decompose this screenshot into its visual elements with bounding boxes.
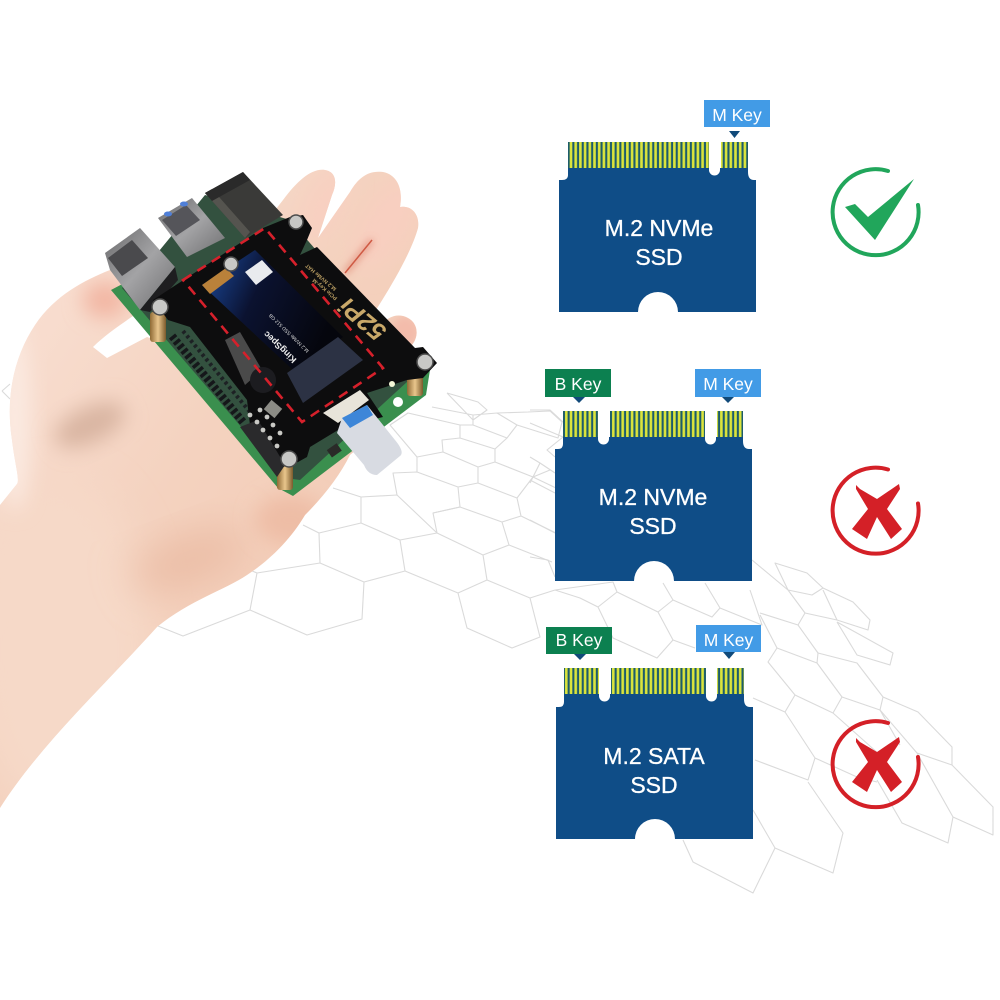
B key label	[546, 627, 612, 660]
raspberry pi board with M.2 HAT	[105, 172, 437, 496]
card text: SSD	[629, 513, 677, 539]
brand marking: PCIe Key-M	[312, 276, 339, 301]
brand marking: M.2 NVMe HAT	[304, 262, 338, 291]
SSD card 1: M.2 NVMe, M key	[559, 100, 770, 312]
M key label: M Key	[703, 374, 753, 394]
ribbon cable	[323, 390, 402, 475]
background hexagon mesh	[2, 384, 993, 893]
M key label	[695, 369, 761, 403]
B key label	[545, 369, 611, 403]
SSD card 2: M.2 NVMe, B and M key	[545, 369, 761, 581]
B key label: B Key	[556, 630, 603, 650]
hand holding the board	[0, 160, 432, 820]
green PCB	[111, 280, 430, 496]
power components	[225, 332, 282, 418]
SSD card 3: M.2 SATA, B and M key	[546, 625, 761, 839]
solder pads	[248, 408, 282, 448]
PCB shadowed top surface	[122, 195, 420, 480]
USB port right	[158, 198, 225, 257]
M.2 SSD: M.2 NVMe SSD 512 GB	[267, 311, 311, 354]
M key label	[696, 625, 761, 659]
switch component	[327, 443, 342, 458]
M.2 slot	[287, 337, 363, 403]
status LED and mounting hole	[389, 381, 403, 407]
card text: M.2 NVMe	[605, 215, 713, 241]
M key label: M Key	[704, 630, 754, 650]
M.2 SSD	[202, 250, 343, 370]
contacts	[563, 411, 743, 437]
screws	[152, 215, 433, 467]
contacts	[568, 142, 748, 168]
icon: red cross	[833, 468, 919, 554]
M key label	[704, 100, 770, 138]
card text: SSD	[630, 772, 678, 798]
icon: red cross	[833, 721, 919, 807]
standoffs	[150, 312, 423, 490]
B key label: B Key	[555, 374, 602, 394]
card text: SSD	[635, 244, 683, 270]
card text	[605, 215, 713, 270]
card text	[603, 743, 705, 798]
QR label	[245, 260, 273, 285]
USB port left	[105, 228, 178, 312]
M key label: M Key	[712, 105, 762, 125]
SSD brand text: KingSpec	[262, 329, 298, 365]
GPIO pin header	[172, 331, 250, 422]
black HAT board	[153, 215, 437, 467]
card text	[599, 484, 707, 539]
card text: M.2 SATA	[603, 743, 705, 769]
icon: green check	[833, 169, 919, 255]
infographic canvas	[0, 100, 994, 894]
ethernet port	[205, 172, 283, 238]
card text: M.2 NVMe	[599, 484, 707, 510]
red dashed highlight	[183, 228, 383, 422]
brand marking	[304, 262, 392, 346]
contacts	[564, 668, 744, 694]
brand marking: 52Pi	[333, 291, 392, 346]
ethernet lower connector	[240, 420, 285, 477]
